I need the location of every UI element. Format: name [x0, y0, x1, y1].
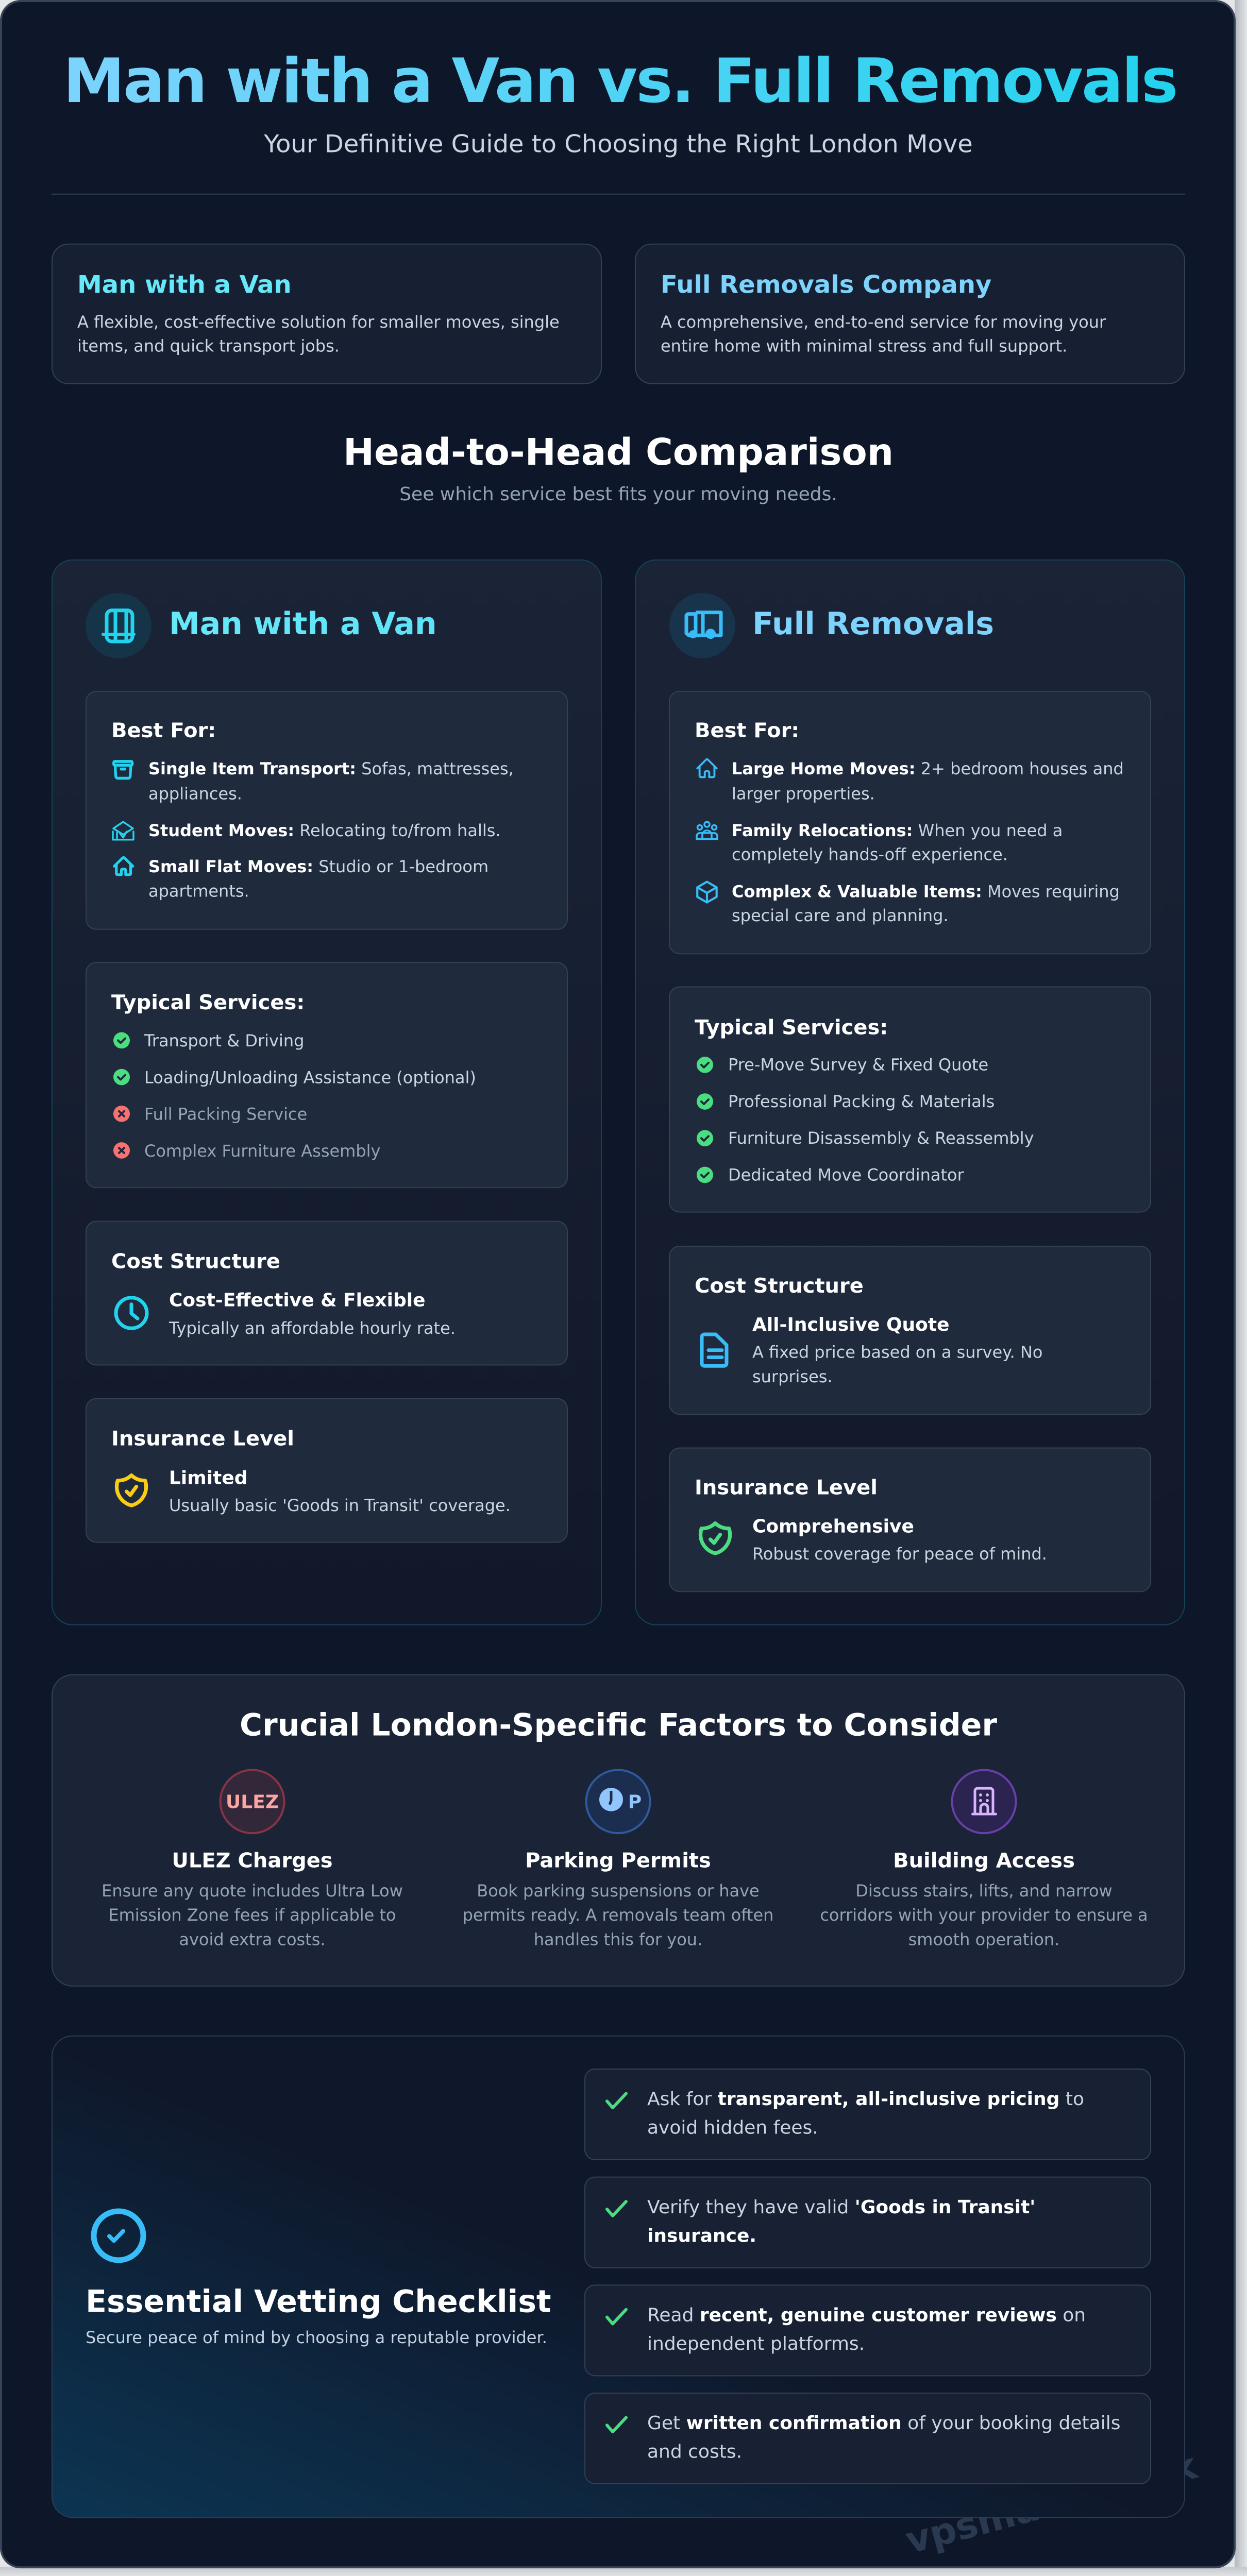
checklist item 1 — [585, 2069, 1151, 2160]
service row: furniture: Furniture Disassembly & Reassembly — [728, 1128, 1034, 1148]
service row: loading: Loading/Unloading Assistance (optional) — [144, 1068, 476, 1087]
checklist item 1: Ask for transparent, all-inclusive pricing to — [647, 2089, 1084, 2110]
list item: single item: Single Item Transport: Sofas, mattresses, — [148, 759, 514, 778]
icon: truck — [669, 593, 735, 658]
factor: building: Discuss stairs, lifts, and narrow — [855, 1881, 1113, 1901]
factor: parking: Book parking suspensions or have — [477, 1881, 760, 1901]
service row: survey: Pre-Move Survey & Fixed Quote — [728, 1055, 988, 1075]
column heading: Full Removals — [752, 607, 994, 642]
service row: transport: Transport & Driving — [144, 1031, 304, 1050]
card heading: Typical Services: — [695, 1016, 888, 1039]
service row: packing: Full Packing Service — [144, 1105, 307, 1124]
service row: packing: Professional Packing & Materials — [728, 1092, 995, 1111]
card: best for — [86, 691, 567, 929]
factor: parking: Parking Permits — [525, 1849, 711, 1872]
checklist item 1: avoid hidden fees. — [647, 2117, 818, 2139]
list item: small flat — [114, 857, 488, 901]
factor: ulez: ULEZ — [226, 1792, 279, 1813]
subtitle: Your Definitive Guide to Choosing the Right London Move — [263, 130, 973, 159]
checklist item 4 — [585, 2393, 1151, 2484]
card heading: Insurance Level — [695, 1476, 878, 1499]
cost description: Typically an affordable hourly rate. — [168, 1318, 456, 1338]
list item: small flat: apartments. — [148, 882, 249, 901]
factor: ulez: Emission Zone fees if applicable to — [108, 1905, 396, 1925]
section heading: head-to-head: Head-to-Head Comparison — [343, 431, 894, 473]
intro text: man with a van: items, and quick transport jobs. — [77, 336, 340, 355]
checklist item 2 — [585, 2177, 1151, 2268]
list item: complex items: Complex & Valuable Items: Moves requiring — [732, 882, 1120, 901]
checklist item 2: insurance. — [647, 2225, 756, 2246]
factor: ulez — [102, 1770, 403, 1950]
card: best for — [669, 691, 1151, 954]
factor: parking — [463, 1770, 773, 1950]
list item: large home — [697, 759, 1124, 804]
cost description: A fixed price based on a survey. No — [752, 1343, 1043, 1362]
list item: family: completely hands-off experience. — [732, 844, 1008, 864]
checklist item 2: Verify they have valid 'Goods in Transit' — [647, 2197, 1035, 2218]
panel: intro full removals — [635, 244, 1185, 384]
icon: check circle — [94, 2211, 143, 2260]
card heading: Best For: — [695, 719, 799, 742]
list item: complex items — [697, 882, 1120, 925]
main title: Man with a Van vs. Full Removals — [63, 45, 1176, 117]
list item: small flat: Small Flat Moves: Studio or 1-bedroom — [148, 857, 488, 876]
cost description: surprises. — [752, 1367, 833, 1386]
factor: ulez: avoid extra costs. — [179, 1930, 326, 1950]
list item: family: Family Relocations: When you need a — [732, 821, 1063, 840]
icon: clock — [116, 1298, 147, 1328]
checklist item 3 — [585, 2285, 1151, 2376]
service row: coordinator: Dedicated Move Coordinator — [728, 1165, 965, 1184]
card: typical services — [669, 987, 1151, 1212]
intro heading: full removals: Full Removals Company — [661, 271, 991, 299]
factor: parking: P — [628, 1792, 642, 1813]
card: insurance level — [669, 1448, 1151, 1591]
factor: ulez: Ensure any quote includes Ultra Low — [102, 1881, 403, 1901]
checklist item 3: independent platforms. — [647, 2333, 865, 2354]
card: typical services — [86, 962, 567, 1188]
checklist subheading: Secure peace of mind by choosing a reputable provider. — [86, 2328, 547, 2347]
factor: building — [820, 1770, 1148, 1950]
card heading: Insurance Level — [111, 1427, 294, 1451]
icon: document — [702, 1334, 727, 1366]
card heading: Cost Structure — [111, 1250, 280, 1273]
list item: single item — [114, 759, 514, 804]
panel: man with a van column — [52, 560, 601, 1625]
list item: complex items: special care and planning. — [732, 906, 949, 925]
list item: student moves: Student Moves: Relocating to/from halls. — [148, 821, 501, 840]
section subheading: See which service best fits your moving needs. — [399, 484, 837, 505]
checklist item 3: Read recent, genuine customer reviews on — [647, 2305, 1086, 2326]
list item: large home: Large Home Moves: 2+ bedroom houses and — [732, 759, 1124, 778]
list item: large home: larger properties. — [732, 784, 875, 804]
service row: assembly: Complex Furniture Assembly — [144, 1141, 380, 1161]
checklist heading: Essential Vetting Checklist — [86, 2284, 551, 2320]
london heading: Crucial London-Specific Factors to Consider — [240, 1708, 998, 1743]
insurance title: Limited — [169, 1468, 248, 1489]
intro text: man with a van: A flexible, cost-effective solution for smaller moves, single — [77, 312, 560, 332]
panel: vetting checklist — [52, 2036, 1185, 2517]
card: cost structure — [669, 1246, 1151, 1414]
list item: family — [697, 821, 1063, 864]
card heading: Typical Services: — [111, 991, 305, 1014]
icon: yellow shield — [117, 1476, 146, 1505]
factor: ulez: ULEZ Charges — [172, 1849, 333, 1872]
cost title: All-Inclusive Quote — [752, 1314, 950, 1335]
icon: green shield — [701, 1523, 730, 1553]
card heading: Cost Structure — [695, 1274, 864, 1298]
card: insurance level — [86, 1399, 567, 1542]
checklist item 4: and costs. — [647, 2442, 742, 2463]
card: cost structure — [86, 1221, 567, 1365]
panel: full removals column — [635, 560, 1185, 1625]
list item: single item: appliances. — [148, 784, 242, 804]
factor: building: corridors with your provider to ensure a — [820, 1905, 1148, 1925]
checklist item 4: Get written confirmation of your booking details — [647, 2413, 1120, 2434]
factor: building: Building Access — [893, 1849, 1075, 1872]
insurance title: Comprehensive — [752, 1516, 914, 1537]
factor: parking: handles this for you. — [534, 1930, 702, 1950]
cost title: Cost-Effective & Flexible — [169, 1290, 426, 1311]
icon: trolley — [86, 593, 151, 658]
card heading: Best For: — [111, 719, 216, 742]
panel: intro man with a van — [52, 244, 601, 384]
intro heading: man with a van: Man with a Van — [77, 271, 292, 299]
factor: building: smooth operation. — [908, 1930, 1059, 1950]
intro text: full removals: A comprehensive, end-to-end service for moving your — [661, 312, 1106, 332]
intro text: full removals: entire home with minimal stress and full support. — [661, 336, 1067, 355]
insurance description: Robust coverage for peace of mind. — [752, 1544, 1047, 1564]
column heading: Man with a Van — [169, 607, 437, 642]
watermark: vpsmart.co.uk — [901, 2444, 1202, 2562]
factor: parking: permits ready. A removals team often — [463, 1905, 773, 1925]
panel: london factors — [52, 1675, 1185, 1986]
insurance description: Usually basic 'Goods in Transit' coverage. — [169, 1496, 511, 1515]
